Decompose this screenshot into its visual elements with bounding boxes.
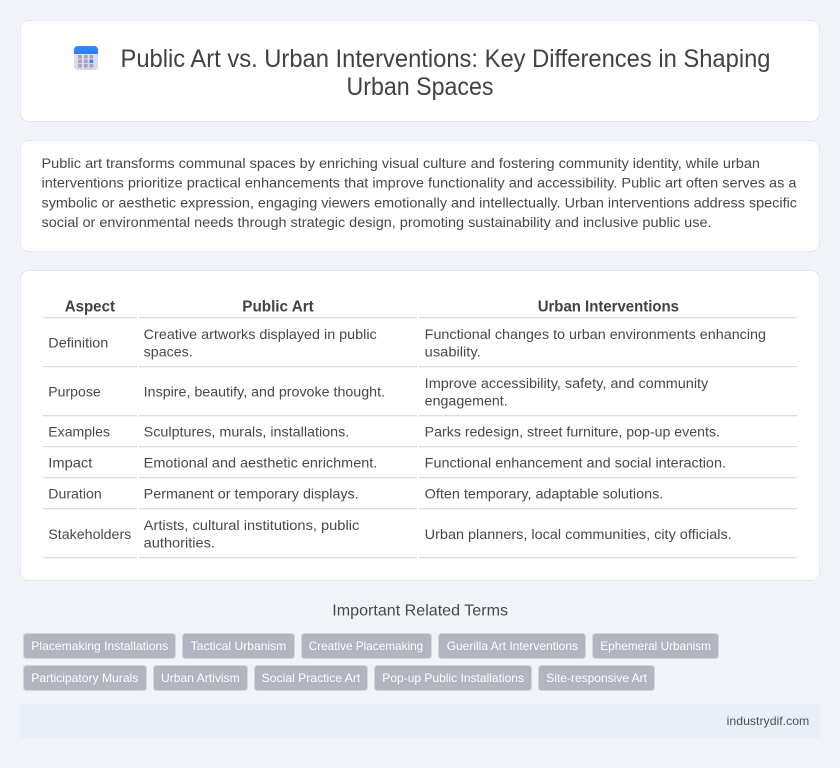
footer bar (20, 704, 820, 738)
related terms tags: Site-responsive Art (546, 671, 648, 685)
related terms tags: Ephemeral Urbanism (600, 639, 711, 653)
row: definition: Creative artworks displayed in public (144, 326, 377, 342)
row: stakeholders: Urban planners, local communities, city officials. (425, 526, 732, 542)
row: impact (48, 455, 726, 471)
row: duration: Duration (48, 486, 102, 502)
related terms tags: Creative Placemaking (309, 639, 423, 653)
title heading: Urban Spaces (346, 73, 494, 101)
row: duration: Permanent or temporary displays. (144, 486, 359, 502)
row: impact: Functional enhancement and social interaction. (425, 455, 726, 471)
row: purpose: engagement. (425, 393, 508, 409)
row: examples: Parks redesign, street furniture, pop-up events. (425, 424, 720, 440)
title heading (120, 45, 770, 101)
row: definition: spaces. (144, 344, 193, 360)
related terms heading: Important Related Terms (332, 603, 508, 620)
row: duration: Often temporary, adaptable solutions. (425, 486, 663, 502)
panel: intro paragraph (20, 140, 820, 252)
intro text block: Public art transforms communal spaces by enriching visual culture and fostering community identity, while urban (42, 155, 760, 171)
intro text block: symbolic or aesthetic expression, engaging viewers emotionally and intellectually. Urban interventions address specific (42, 194, 797, 210)
row: stakeholders: Stakeholders (48, 526, 131, 542)
related terms tags: Guerilla Art Interventions (447, 639, 578, 653)
footer bar: industrydif.com (727, 714, 809, 728)
row: purpose: Improve accessibility, safety, and community (425, 375, 708, 391)
related terms tags: Placemaking Installations (31, 639, 168, 653)
row: definition (48, 326, 766, 360)
table header row (65, 299, 679, 316)
intro text block: social or environmental needs through strategic design, promoting sustainability and inclusive public use. (42, 214, 712, 230)
table header row: Urban Interventions (538, 299, 679, 316)
related terms tags (24, 634, 718, 690)
row: impact: Impact (48, 455, 92, 471)
related terms tags: Urban Artivism (161, 671, 240, 685)
row: purpose: Purpose (48, 384, 101, 400)
related terms tags: Pop-up Public Installations (382, 671, 524, 685)
row: examples (48, 424, 720, 440)
row: definition: Functional changes to urban environments enhancing (425, 326, 766, 342)
icon: calendar (74, 46, 98, 70)
table header row: Aspect (65, 299, 116, 316)
row: examples: Sculptures, murals, installations. (144, 424, 349, 440)
panel: comparison table (20, 270, 820, 580)
table header row: Public Art (242, 299, 314, 316)
row: stakeholders: Artists, cultural institutions, public (144, 517, 359, 533)
row: impact: Emotional and aesthetic enrichment. (144, 455, 377, 471)
related terms tags: Participatory Murals (31, 671, 138, 685)
row: purpose (48, 375, 708, 409)
related terms tags: Tactical Urbanism (191, 639, 286, 653)
related terms tags: Social Practice Art (262, 671, 361, 685)
intro text block (42, 155, 797, 230)
panel: title header (20, 20, 820, 122)
title heading: Public Art vs. Urban Interventions: Key Differences in Shaping (120, 45, 770, 73)
row: stakeholders (48, 517, 732, 551)
row: duration (48, 486, 663, 502)
row: purpose: Inspire, beautify, and provoke thought. (144, 384, 385, 400)
intro text block: interventions prioritize practical enhancements that improve functionality and accessibility. Public art often serves as a (42, 175, 797, 191)
row: definition: usability. (425, 344, 481, 360)
row: definition: Definition (48, 335, 108, 351)
row: examples: Examples (48, 424, 110, 440)
row: stakeholders: authorities. (144, 535, 215, 551)
